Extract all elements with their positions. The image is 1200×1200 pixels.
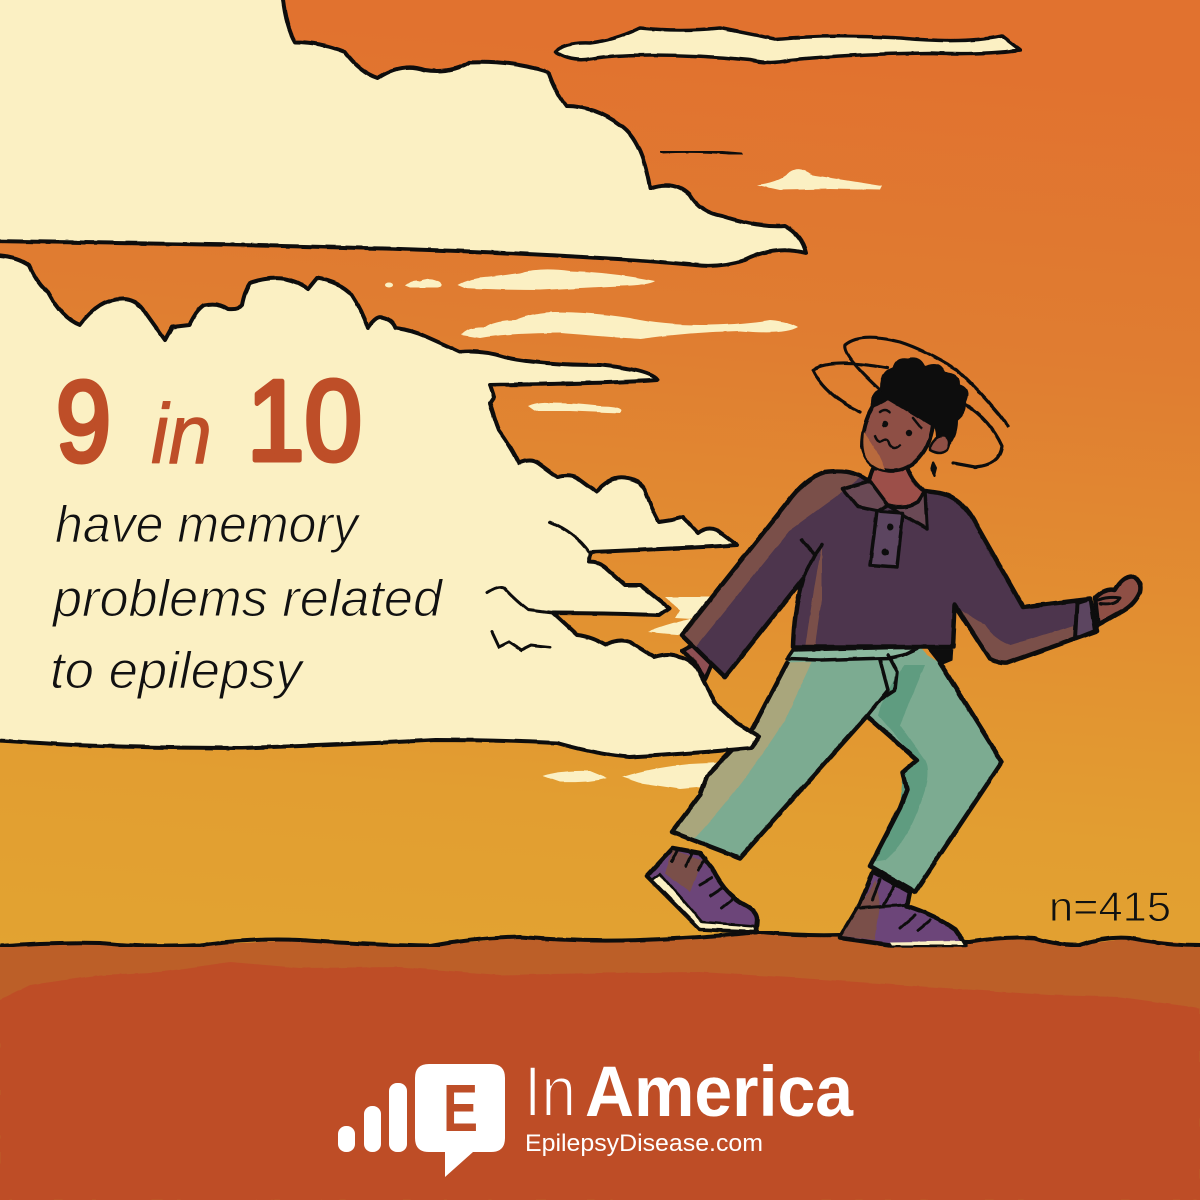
trousers <box>672 646 1002 892</box>
headline: 9 in 10: in <box>151 387 212 481</box>
background: sunset sky <box>0 0 1200 950</box>
icon: speech bubble with E: E <box>443 1071 478 1146</box>
body text: have memory <box>55 496 361 554</box>
headline: 9 in 10: 9 <box>56 359 111 486</box>
cream cloud streaks <box>385 169 882 789</box>
ground: brown and rust bands <box>0 932 1200 1200</box>
icon: signal bars <box>338 1083 407 1152</box>
cloud inner contour lines <box>487 522 589 650</box>
logo: InAmerica EpilepsyDisease.com <box>338 1053 853 1177</box>
large upper cloud <box>0 0 806 266</box>
logo wordmark: In <box>524 1053 576 1132</box>
body text: problems related <box>51 570 444 628</box>
icon: speech bubble with E <box>415 1064 505 1177</box>
left hand <box>682 645 713 680</box>
right hand <box>1095 577 1140 625</box>
large lower cloud <box>0 255 759 757</box>
logo wordmark: America <box>585 1053 853 1132</box>
sweater <box>682 471 1097 677</box>
sample size note: n=415 <box>1049 883 1171 930</box>
dizziness rings <box>813 338 1008 467</box>
left shoe <box>647 848 757 932</box>
headline: 9 in 10: 10 <box>247 358 362 485</box>
head <box>862 357 968 476</box>
headline: 9 in 10 <box>56 358 362 486</box>
top thin cloud <box>555 28 1020 62</box>
neck <box>868 468 925 507</box>
body text <box>50 496 444 700</box>
right shoe <box>840 872 966 945</box>
person: dizzy man walking <box>647 338 1140 945</box>
logo wordmark <box>524 1053 853 1157</box>
small dark sky stroke <box>662 151 741 154</box>
body text: to epilepsy <box>50 642 305 700</box>
logo wordmark: EpilepsyDisease.com <box>525 1130 763 1157</box>
